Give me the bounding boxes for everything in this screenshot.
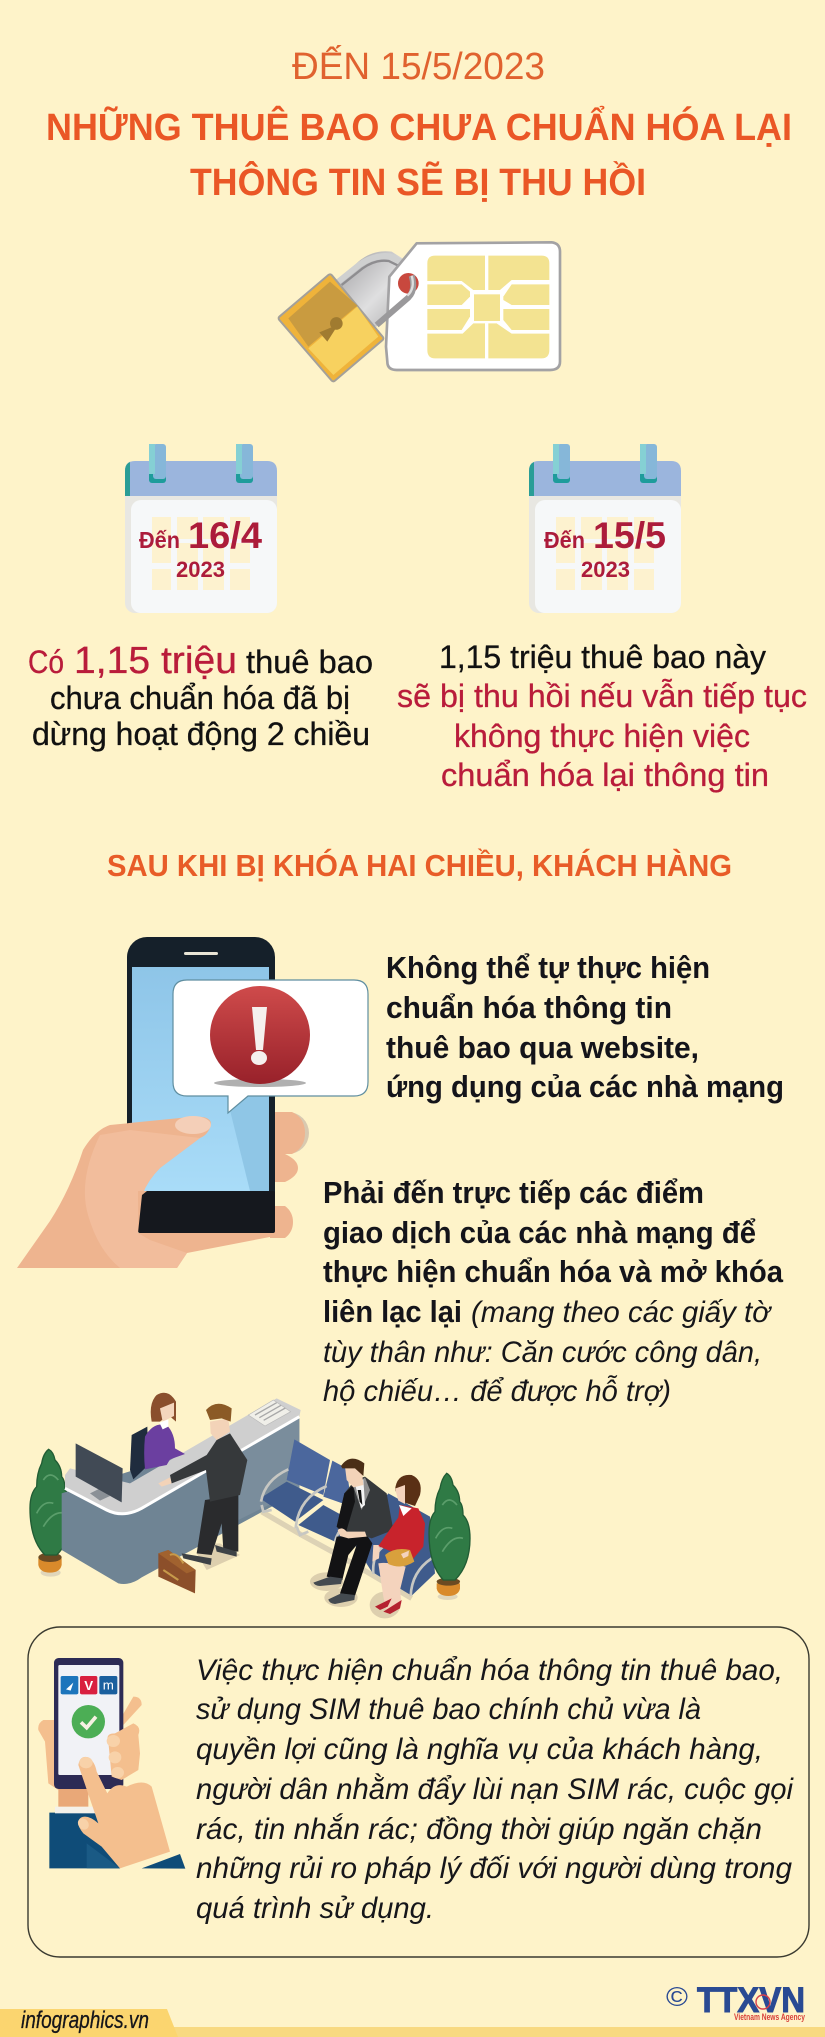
text block: self-service not possible: Không thể tự thực hiện [386,950,710,985]
text block: must visit transaction points: giao dịch của các nhà mạng để [323,1215,756,1250]
SIM card [386,242,560,370]
text block: must visit transaction points [323,1175,784,1408]
shackle [333,251,405,327]
text block: left column: chưa chuẩn hóa đã bị [50,680,350,716]
text block: right column [397,639,807,793]
alert icon [210,986,310,1087]
text block: self-service not possible: ứng dụng của các nhà mạng [386,1069,784,1104]
icon: SIM card with padlock [281,242,560,379]
title block [46,44,792,204]
icon: calendar 16/4 [125,444,277,613]
text block: must visit transaction points: liên lạc lại [323,1294,462,1329]
SIM chip [427,256,549,358]
text block: must visit transaction points: hộ chiếu… để được hỗ trợ) [323,1375,671,1408]
logo: TTXVN: © [666,1982,688,2012]
text block: left column: Có [28,644,64,680]
left plant [30,1449,72,1577]
seated man [310,1459,393,1607]
note text: người dân nhằm đẩy lùi nạn SIM rác, cuộc gọi [196,1773,794,1806]
hole and shackle leg [398,273,419,294]
note text: sử dụng SIM thuê bao chính chủ vừa là [196,1693,701,1726]
text block: left column [28,640,373,752]
icon: calendar 16/4: Đến [139,527,180,553]
icon: hand tapping phone [38,1658,185,1869]
text block: must visit transaction points: tùy thân như: Căn cước công dân, [323,1336,762,1369]
icon: calendar 15/5 [529,444,681,613]
icon: hand tapping phone: m [103,1677,114,1692]
icon: hand tapping phone: V [84,1678,93,1693]
text block: right column: 1,15 triệu thuê bao này [439,639,766,675]
text block: self-service not possible [386,950,784,1104]
note text: Việc thực hiện chuẩn hóa thông tin thuê bao, [196,1654,783,1687]
note text: quyền lợi cũng là nghĩa vụ của khách hàng, [196,1733,763,1766]
section heading: SAU KHI BỊ KHÓA HAI CHIỀU, KHÁCH HÀNG [107,847,732,883]
monitor [76,1443,123,1502]
icon: calendar 15/5: 15/5 [593,515,666,556]
footer source: infographics.vn [21,2007,149,2034]
title line 2: THÔNG TIN SẼ BỊ THU HỒI [190,159,646,204]
note text: quá trình sử dụng. [196,1892,434,1925]
note text: những rủi ro pháp lý đối với người dùng trong [196,1852,792,1885]
icon: calendar 16/4: 16/4 [188,515,262,556]
text block: left column: thuê bao [246,644,373,680]
text block: left column: 1,15 triệu [74,640,237,682]
footer band [0,2007,825,2037]
seated woman [370,1475,425,1618]
illustration: customers waiting on chairs [260,1439,470,1618]
woman at desk [130,1393,185,1479]
note text [196,1654,794,1925]
panel: closing note [28,1627,809,1957]
text block: right column: sẽ bị thu hồi nếu vẫn tiếp tục [397,678,807,714]
date heading: ĐẾN 15/5/2023 [292,44,545,88]
icon: calendar 15/5: Đến [544,527,585,553]
note text: rác, tin nhắn rác; đồng thời giúp ngăn chặn [196,1813,762,1846]
right plant [429,1473,470,1600]
speech bubble [173,980,368,1113]
waiting chairs [260,1439,435,1598]
standing man [158,1404,247,1570]
text block: must visit transaction points: Phải đến trực tiếp các điểm [323,1175,704,1210]
illustration: reception desk [30,1393,301,1593]
padlock [281,277,381,379]
text block: must visit transaction points: (mang theo các giấy tờ [471,1296,773,1329]
text block: must visit transaction points: thực hiện chuẩn hóa và mở khóa [323,1254,784,1289]
briefcase [158,1550,196,1593]
icon: calendar 15/5: 2023 [581,557,630,582]
reception desk [62,1398,301,1584]
text block: self-service not possible: thuê bao qua website, [386,1030,699,1065]
text block: right column: không thực hiện việc [454,718,750,754]
title line 1: NHỮNG THUÊ BAO CHƯA CHUẨN HÓA LẠI [46,104,792,149]
text block: left column: dừng hoạt động 2 chiều [32,716,370,752]
logo: TTXVN: TTXVN [697,1981,805,2020]
text block: self-service not possible: chuẩn hóa thông tin [386,990,672,1025]
icon: hand holding phone with alert bubble [17,937,368,1268]
icon: calendar 16/4: 2023 [176,557,225,582]
text block: right column: chuẩn hóa lại thông tin [441,757,769,793]
